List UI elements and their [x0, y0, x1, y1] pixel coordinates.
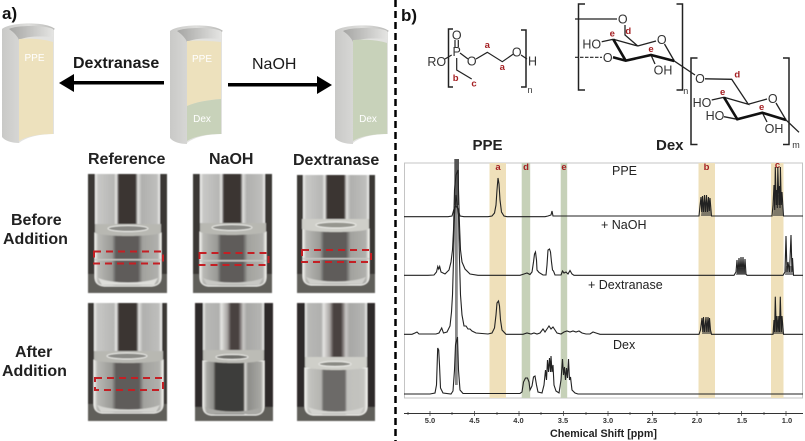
x axis: 4.0	[513, 416, 524, 425]
structure: PPE: P	[453, 45, 461, 59]
photo: reference before addition	[88, 174, 167, 293]
spectrum: Dex	[404, 337, 803, 394]
arrow: Dextranase	[59, 74, 164, 92]
structure: PPE: O	[452, 28, 462, 42]
band b	[698, 163, 715, 398]
structure: Dex: e	[610, 28, 615, 40]
panel b label: b)	[401, 6, 417, 25]
chart: NMR spectra	[404, 159, 803, 440]
trace label: PPE: PPE	[612, 164, 637, 178]
x axis: 1.0	[782, 416, 792, 425]
column heading: Dextranase: Dextranase	[293, 152, 379, 169]
structure: PPE: b	[453, 73, 459, 84]
panel divider	[394, 0, 397, 441]
structure: Dex: O	[768, 92, 778, 106]
structure: Dex: e	[759, 102, 764, 113]
cylinder: PPE and Dex: PPE	[192, 54, 212, 65]
dashed box: interface	[200, 253, 268, 265]
x axis: 4.5	[469, 416, 480, 425]
structure: Dex: O	[618, 12, 628, 26]
cylinder: PPE and Dex: Dex	[193, 114, 211, 125]
structure: Dex: HO	[582, 38, 601, 52]
spectrum: NaOH	[404, 170, 803, 275]
cylinder: Dex only	[335, 25, 389, 144]
photo: NaOH before addition	[193, 174, 272, 293]
band label e: e	[561, 162, 567, 173]
panel a: degradation schematic	[2, 23, 389, 144]
structure: Dex: d	[625, 26, 631, 37]
column heading: NaOH: NaOH	[209, 151, 253, 168]
spectrum: Dextranase	[404, 195, 803, 334]
cylinder: Dex only: Dex	[359, 114, 377, 125]
panel a: vial photo grid	[2, 151, 379, 421]
structure: Dex: O	[657, 33, 667, 47]
dashed box: interface	[95, 378, 163, 390]
label: NaOH: NaOH	[252, 56, 296, 73]
structure: Dex: O	[603, 51, 613, 65]
row heading: Before Addition: Addition	[3, 231, 68, 248]
structure: PPE	[427, 28, 537, 95]
x axis: 2.0	[692, 416, 702, 425]
structure: Dex: OH	[654, 64, 672, 78]
column heading: Reference: Reference	[88, 151, 165, 168]
band c	[771, 163, 784, 398]
band a	[490, 163, 506, 398]
band label c: c	[775, 160, 780, 171]
heading: PPE: PPE	[472, 137, 503, 154]
label: Dextranase: Dextranase	[73, 55, 159, 72]
trace label: + Dextranase: + Dextranase	[588, 278, 663, 292]
structure: PPE: O	[512, 46, 522, 60]
dashed box: interface	[302, 250, 371, 262]
water peak column	[454, 159, 459, 385]
cylinder: PPE only: PPE	[24, 53, 45, 64]
structure: Dex: HO	[693, 96, 712, 110]
plot frame	[404, 163, 802, 398]
structure: PPE: RO	[427, 55, 446, 69]
structure: PPE: H	[528, 54, 537, 68]
structure: Dex: m	[792, 140, 800, 150]
structure: Dex: e	[720, 87, 725, 98]
heading: Dex: Dex	[656, 137, 684, 154]
multiplet fill: PPE	[701, 195, 783, 216]
cylinder: PPE and Dex	[170, 25, 223, 144]
spectrum: PPE	[404, 167, 803, 217]
trace label: + NaOH: + NaOH	[601, 218, 647, 232]
band label d: d	[523, 162, 529, 173]
x axis: 1.5	[737, 416, 747, 425]
multiplet fill: lower traces	[702, 266, 793, 334]
structure: Dex: O	[695, 72, 705, 86]
structure: PPE: a	[500, 62, 506, 73]
structure: Dex: e	[648, 44, 654, 55]
panel a label: a)	[2, 4, 17, 23]
row heading: After Addition: After	[15, 344, 52, 361]
structure: PPE: c	[471, 78, 477, 90]
band label a: a	[495, 162, 501, 173]
x axis: 3.0	[603, 416, 613, 425]
row heading: After Addition: Addition	[2, 363, 67, 380]
x axis: 5.0	[425, 416, 435, 425]
cylinder: PPE only	[2, 23, 55, 143]
x axis	[404, 411, 803, 425]
structure: Dex: OH	[765, 122, 783, 136]
x axis title: Chemical Shift [ppm]	[550, 428, 657, 440]
structure: Dex: d	[734, 70, 740, 80]
row heading: Before Addition: Before	[11, 212, 62, 229]
structure: Dex: n	[683, 86, 688, 96]
dashed box: interface	[94, 252, 163, 264]
structure: Dex: HO	[706, 109, 725, 123]
arrow: NaOH	[228, 76, 332, 94]
photo: Dextranase after addition	[297, 303, 375, 421]
band e	[561, 163, 567, 398]
photo: Dextranase before addition	[297, 175, 375, 293]
x axis: 2.5	[647, 416, 657, 425]
photo: reference after addition	[88, 303, 167, 421]
structure: PPE: n	[527, 85, 533, 95]
trace label: Dex: Dex	[613, 338, 636, 352]
x axis: 3.5	[558, 416, 568, 425]
band d	[522, 163, 530, 398]
photo: NaOH after addition	[195, 303, 273, 421]
band label b: b	[704, 162, 710, 173]
structure: Dex	[575, 4, 800, 150]
structure: PPE: O	[467, 54, 477, 68]
structure: PPE: a	[485, 40, 491, 51]
